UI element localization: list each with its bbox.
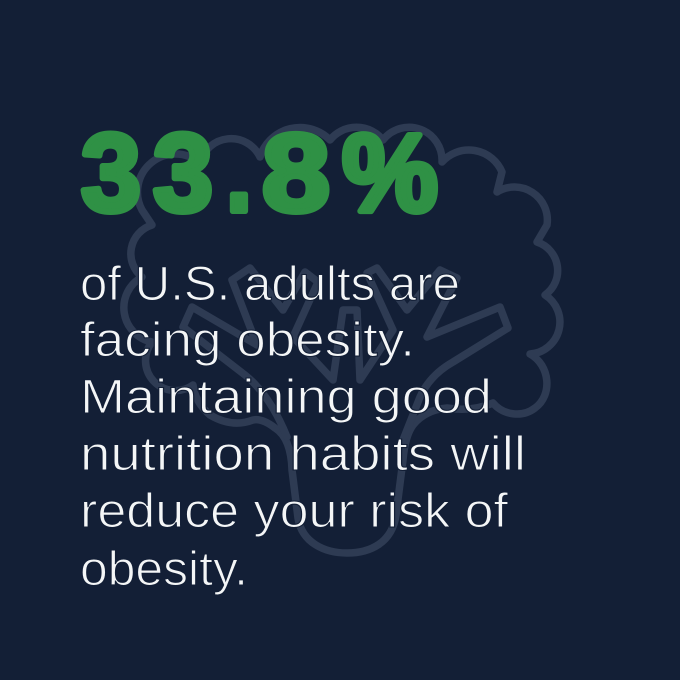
body text: nutrition habits will (80, 428, 526, 481)
headline statistic (81, 112, 438, 235)
headline statistic: . (226, 112, 252, 235)
body text: obesity. (80, 543, 248, 596)
icon: broccoli outline (124, 127, 560, 553)
headline statistic: 3 (81, 112, 141, 235)
body text: of U.S. adults are (80, 258, 460, 311)
headline statistic: 3 (153, 112, 213, 235)
body text: Maintaining good (80, 371, 492, 424)
headline statistic: % (342, 112, 438, 235)
body text: reduce your risk of (80, 485, 509, 538)
headline statistic: 8 (262, 112, 330, 235)
body text (80, 258, 526, 596)
body text: facing obesity. (80, 314, 415, 367)
